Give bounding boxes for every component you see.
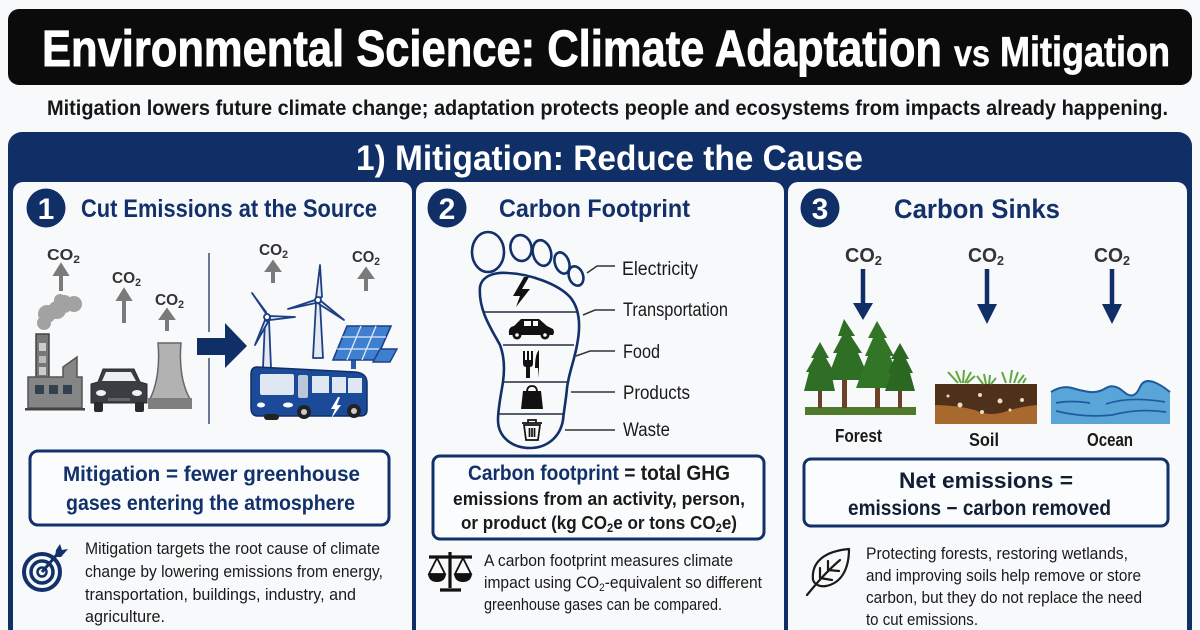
title banner: vs [954,33,990,74]
emissions labels after: CO [259,242,283,259]
footprint category labels: Electricity [622,259,698,280]
icon: target [24,544,68,590]
emissions labels before: 2 [178,299,184,311]
callout: carbon footprint definition: e) [722,512,737,533]
text: carbon sinks explanation: carbon, but they do not replace the need [866,588,1142,607]
title banner: Mitigation [1000,28,1170,75]
text: carbon sinks explanation: Protecting forests, restoring wetlands, [866,544,1128,563]
title banner [8,9,1192,85]
card 3: carbon sinks [788,182,1187,630]
icon: wind turbines [252,265,344,368]
emissions labels before: CO [155,292,179,309]
card 2: carbon footprint [416,182,784,630]
text: mitigation explanation: transportation, buildings, industry, and [85,585,356,604]
sink: soil [935,245,1037,450]
text: mitigation explanation: agriculture. [85,607,165,626]
text: carbon footprint explanation: A carbon footprint measures climate [484,551,733,570]
number badge 2 [428,188,466,228]
icon: car [91,369,147,412]
sink: forest: Forest [835,426,882,446]
callout: mitigation definition: Mitigation = fewer greenhouse [63,463,360,486]
icon: balance scale [428,552,472,590]
emissions labels after [259,242,380,291]
emissions labels after: 2 [282,249,288,261]
emissions labels before: CO [47,247,71,264]
emissions labels before: CO [112,270,136,287]
emissions labels before [47,247,184,331]
callout: carbon footprint definition: e or tons CO [613,512,716,533]
footprint category labels [622,259,728,441]
emissions labels after: 2 [374,256,380,268]
callout: net emissions: emissions − carbon removed [848,497,1111,520]
text: carbon footprint explanation: 2 [599,582,605,594]
emissions labels before: 2 [135,277,141,289]
number badge 3: 3 [812,193,828,226]
callout: carbon footprint definition: 2 [716,521,722,535]
sink: forest [804,245,916,446]
sink: soil: 2 [997,253,1004,268]
icon: fork and knife [523,350,539,378]
sink: ocean: CO [1094,245,1124,267]
emissions labels after: CO [352,249,376,266]
emissions labels before: 2 [73,254,80,266]
panel: mitigation [8,132,1192,630]
sink: forest: CO [845,245,875,267]
arrow: transition to clean [197,323,247,368]
icon: lightning bolt [513,277,530,307]
text: mitigation explanation: Mitigation targets the root cause of climate [85,539,380,558]
footprint category labels: Waste [623,420,670,441]
title banner: Environmental Science: Climate Adaptation [42,20,942,77]
card 3 heading: Carbon Sinks [894,194,1060,224]
icon: leaf [807,549,849,595]
text: carbon sinks explanation: and improving soils help remove or store [866,566,1141,585]
number badge 1: 1 [38,193,54,226]
text: carbon footprint explanation: impact using CO [484,573,610,592]
icon: trash can [522,420,542,440]
callout: carbon footprint definition: 2 [607,521,614,535]
callout: carbon footprint definition: emissions from an activity, person, [453,488,745,509]
callout: mitigation definition: gases entering the atmosphere [66,492,355,515]
sink: ocean [1051,245,1170,450]
callout: carbon footprint definition [433,456,764,539]
text: mitigation explanation [85,539,383,626]
sink: ocean: 2 [1123,253,1130,268]
callout: net emissions: Net emissions = [899,468,1073,493]
callout: net emissions [804,459,1168,526]
sink: ocean: Ocean [1087,430,1133,450]
text: carbon sinks explanation [866,544,1142,629]
icon: shopping bag [521,386,543,409]
panel heading: 1) Mitigation: Reduce the Cause [356,139,863,178]
text: mitigation explanation: change by lowering emissions from energy, [85,562,383,581]
icon: car silhouette [509,319,554,340]
number badge 1 [26,188,66,228]
text: carbon footprint explanation: greenhouse gases can be compared. [484,595,722,614]
icon: cooling tower [148,343,192,409]
footprint category labels: Transportation [623,300,728,321]
footprint category labels: Food [623,342,660,363]
callout: mitigation definition [30,451,389,525]
icon: solar panel [333,326,397,369]
footprint leader lines [565,266,615,430]
sink: soil: Soil [969,430,999,450]
subtitle: Mitigation lowers future climate change; adaptation protects people and ecosystems from impacts already happening. [47,97,1168,120]
text: carbon footprint explanation: -equivalent so different [605,573,762,592]
footprint category labels: Products [623,383,690,404]
callout: carbon footprint definition: Carbon footprint = total GHG [468,462,730,485]
text: carbon footprint explanation [484,551,762,614]
sink: soil: CO [968,245,998,267]
number badge 3 [800,188,840,228]
card 1: cut emissions [13,182,412,630]
card 2 heading: Carbon Footprint [499,195,691,223]
icon: factory with smoke [25,294,85,410]
text: carbon sinks explanation: to cut emissions. [866,610,978,629]
number badge 2: 2 [439,193,455,226]
callout: carbon footprint definition: or product (kg CO [461,512,619,533]
icon: electric bus [251,367,367,420]
sink: forest: 2 [875,253,882,268]
card 1 heading: Cut Emissions at the Source [81,195,377,223]
footprint diagram [472,232,728,448]
